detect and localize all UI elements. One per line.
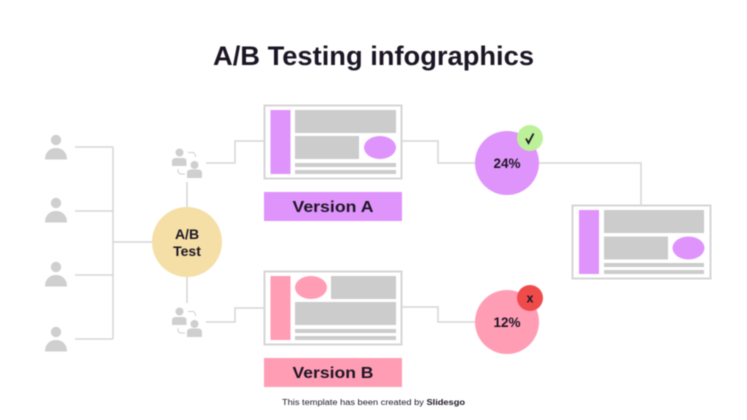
result: version B 12%: 12% — [493, 315, 521, 330]
icon: user swap top — [172, 148, 202, 178]
label: Version A: Version A — [292, 199, 374, 216]
A/B test node — [152, 207, 222, 277]
result: version B 12% — [475, 285, 543, 354]
result: version A 24%: 24% — [493, 156, 521, 171]
connector: version B to result — [402, 307, 476, 322]
icon: person 4 — [45, 327, 67, 352]
A/B test node: Test — [173, 243, 201, 259]
icon: person 1 — [45, 135, 67, 160]
connector: winner to final page — [539, 163, 641, 205]
page mockup: version A — [264, 106, 402, 178]
badge: success check — [517, 125, 543, 151]
page mockup: version B — [264, 272, 402, 344]
page mockup: winning version — [572, 206, 710, 278]
result: version A 24% — [475, 125, 543, 195]
icon: person 2 — [45, 198, 67, 222]
label: Version B: Version B — [292, 365, 374, 382]
icon: person 3 — [45, 262, 67, 286]
connector: audience to test — [75, 147, 152, 339]
badge: failure x: x — [527, 292, 534, 306]
title: A/B Testing infographics — [213, 41, 534, 71]
label: Version B — [264, 358, 402, 387]
connector: segment to version B — [206, 308, 264, 322]
connector: test to segments — [186, 182, 188, 303]
connector: segment to version A — [206, 141, 264, 163]
label: Version A — [264, 192, 402, 221]
A/B test node: A/B — [175, 226, 199, 242]
connector: version A to result — [402, 141, 476, 163]
icon: user swap bottom — [172, 308, 202, 337]
footer credit: This template has been created by Slidesgo — [282, 398, 465, 407]
